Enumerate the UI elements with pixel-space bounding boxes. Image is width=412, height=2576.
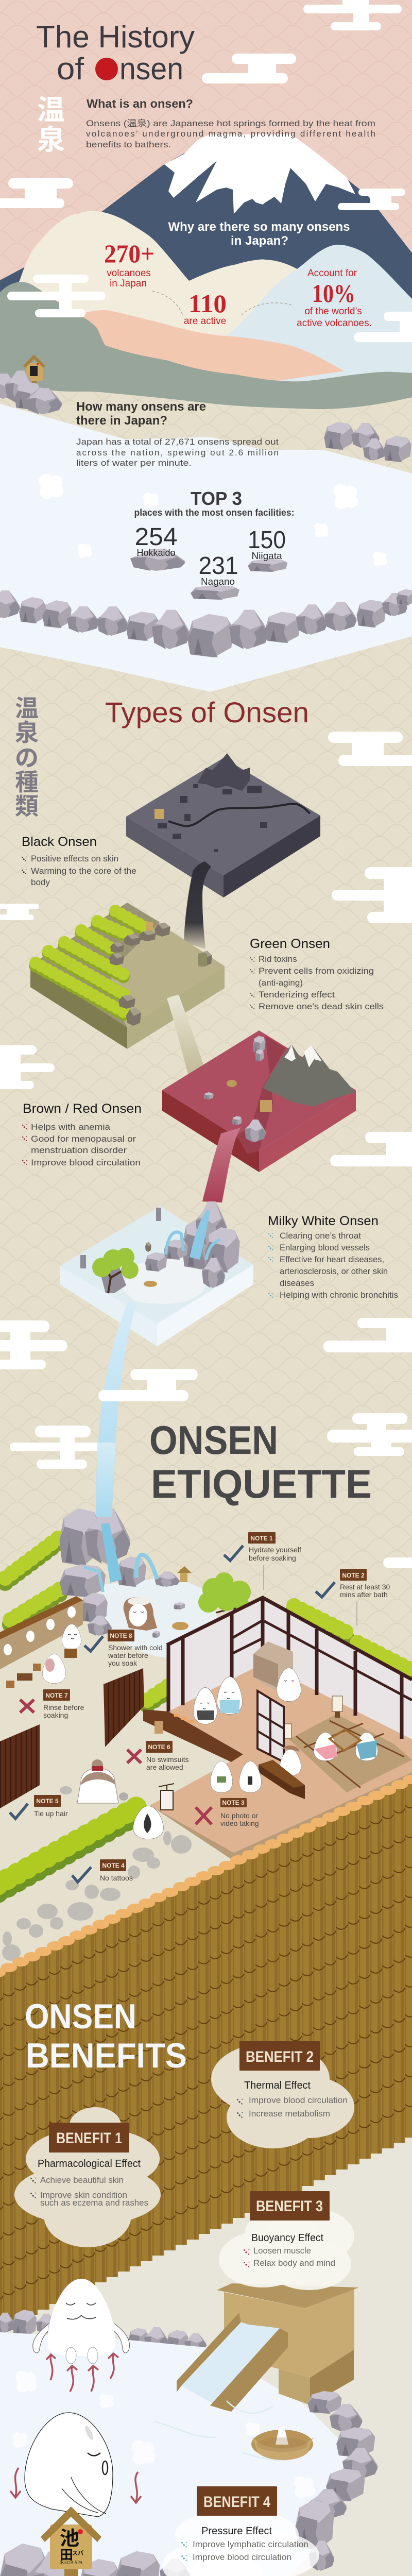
text: milky white onsen: Milky White Onsen	[268, 1214, 379, 1228]
note 8: water before	[108, 1651, 148, 1659]
benefit 1: such as eczema and rashes	[40, 2198, 148, 2208]
text: red onsen: Good for menopausal or	[31, 1134, 136, 1144]
rocks: left cluster	[0, 370, 62, 414]
kanji: types of onsen: 温	[15, 695, 39, 722]
note 3: NOTE 3	[222, 1799, 245, 1806]
benefit 4: Improve blood circulation	[193, 2553, 291, 2562]
etiquette scene ground	[0, 1548, 412, 1976]
note 3: No photo or	[220, 1811, 258, 1820]
top 3: Hokkaido: Hokkaido	[137, 548, 175, 558]
note 8: you soak	[108, 1659, 138, 1667]
stat: 110 active	[184, 289, 227, 327]
text: black onsen: body	[31, 877, 50, 887]
pale blue hill	[226, 245, 412, 381]
how many onsens text: there in Japan?	[76, 414, 167, 428]
text: milky white onsen: Enlarging blood vessels	[280, 1243, 370, 1252]
big sign: 池	[60, 2528, 79, 2550]
stat: 110 active: 110	[188, 289, 227, 318]
steam puffs lower	[12, 2371, 315, 2498]
top 3 heading: TOP 3	[191, 488, 242, 509]
note 1	[224, 1532, 301, 1590]
stepping stones	[2, 1831, 192, 1961]
cloud: top right	[303, 0, 402, 30]
cloud: benefit 3: Loosen muscle	[253, 2246, 311, 2256]
text: milky white onsen: diseases	[280, 1278, 314, 1288]
mountain snow cap	[164, 134, 355, 214]
note 2: Rest at least 30	[340, 1583, 390, 1591]
note 6	[127, 1741, 188, 1771]
text: milky white onsen: arteriosclerosis, or other skin	[280, 1266, 388, 1276]
stat: 10 percent: 10%	[312, 279, 355, 308]
small wooden sign	[23, 354, 45, 397]
right rock chain	[295, 2391, 378, 2571]
waterfall: green	[167, 995, 206, 1083]
hot spring pool	[0, 2332, 368, 2576]
peach hill	[84, 310, 344, 384]
text: green onsen: Prevent cells from oxidizing	[259, 966, 374, 976]
big egg: floating	[25, 2413, 113, 2517]
benefit 4: BENEFIT 4	[203, 2494, 270, 2511]
egg faces	[68, 1634, 294, 1775]
cloud: benefit 3: BENEFIT 3	[256, 2198, 323, 2215]
kanji: types of onsen: 泉	[15, 719, 39, 746]
shoes	[174, 1714, 194, 1723]
note 1: Hydrate yourself	[249, 1546, 301, 1554]
note 8	[84, 1630, 163, 1667]
green hill	[0, 282, 412, 409]
block: black onsen	[126, 753, 320, 897]
cloud: benefit 3	[219, 2191, 354, 2290]
text: black onsen: Warming to the core of the	[31, 866, 136, 876]
cloud: right of mountain	[338, 189, 405, 210]
background: pink pattern	[0, 0, 412, 412]
section text: what is an onsen	[86, 97, 375, 149]
text: red onsen	[22, 1101, 142, 1167]
dashed connector right	[242, 303, 291, 315]
how many onsens text: liters of water per minute.	[76, 458, 192, 468]
kanji: onsen	[37, 95, 65, 156]
cloud: over left hill	[7, 275, 106, 317]
text: green onsen: Rid toxins	[259, 954, 297, 964]
stat: 10 percent: active volcanoes.	[297, 318, 372, 329]
heading: onsen benefits	[25, 1997, 187, 2075]
cloud: upper right	[328, 732, 412, 766]
note 5: NOTE 5	[36, 1798, 59, 1805]
hedges	[5, 1535, 412, 1705]
top 3 heading	[134, 488, 295, 518]
text: black onsen	[22, 835, 136, 887]
note 5	[10, 1795, 68, 1819]
top 3: Niigata	[248, 527, 287, 572]
steam puffs	[39, 474, 387, 566]
text: red onsen: Helps with anemia	[31, 1122, 111, 1132]
text: milky white onsen: Effective for heart diseases,	[280, 1255, 384, 1264]
long hedge	[0, 1759, 412, 1892]
top 3: Niigata: Niigata	[251, 551, 283, 561]
benefit 4: Pressure Effect	[201, 2526, 272, 2537]
note 1: NOTE 1	[250, 1535, 273, 1542]
lower ground	[0, 1958, 412, 2576]
how many onsens text	[76, 400, 279, 468]
top 3: Nagano	[191, 552, 239, 600]
top 3: Hokkaido	[130, 523, 185, 571]
rocks: pool edge	[0, 589, 412, 657]
egg with hair bun	[60, 1759, 128, 1803]
tree	[198, 1572, 251, 1622]
top 3: Niigata: 150	[248, 527, 286, 554]
text: green onsen: Green Onsen	[250, 937, 330, 951]
hot spring water	[0, 404, 412, 692]
cabinet	[253, 1641, 293, 1690]
box and slide	[177, 2283, 359, 2412]
bamboo fence	[0, 1780, 412, 2331]
question: why so many onsens: Why are there so many onsens	[168, 220, 350, 234]
section text: what is an onsen: benefits to bathers.	[86, 140, 171, 149]
how many onsens text: How many onsens are	[76, 400, 206, 414]
kanji: onsen: 泉	[37, 125, 65, 156]
note 7: soaking	[43, 1711, 68, 1719]
eggs: shower and rinse	[6, 1624, 81, 1688]
question: why so many onsens: in Japan?	[231, 234, 288, 248]
block: red onsen	[162, 1030, 356, 1172]
eggs: photo takers	[210, 1761, 262, 1793]
benefit 1: Pharmacological Effect	[38, 2158, 141, 2170]
title: The History	[36, 20, 195, 54]
note 3: video taking	[220, 1819, 259, 1827]
benefit 1: Improve skin condition	[40, 2191, 127, 2200]
kanji: types of onsen: 類	[15, 793, 39, 820]
cloud: left small	[0, 904, 39, 920]
heading: onsen benefits: ONSEN	[25, 1997, 136, 2036]
note 6: NOTE 6	[148, 1743, 170, 1751]
reception desk	[259, 1745, 305, 1799]
benefit 4	[162, 2486, 319, 2576]
big sign: スパ	[72, 2550, 83, 2556]
text: red onsen: Improve blood circulation	[31, 1158, 141, 1167]
how many onsens text: Japan has a total of 27,671 onsens spread out	[76, 437, 279, 447]
eggs: changing room	[193, 1668, 378, 1761]
text: milky white onsen: Helping with chronic bronchitis	[280, 1290, 398, 1300]
text: red onsen: Brown / Red Onsen	[23, 1101, 142, 1116]
rock row behind pool	[0, 2310, 207, 2352]
cloud: left lower	[0, 1045, 55, 1089]
building walls and frame	[167, 1598, 412, 1739]
stat: 270+ volcanoes	[104, 239, 154, 289]
clouds: below milky block	[0, 1318, 412, 1568]
building floor	[143, 1664, 412, 1861]
paper lanterns	[282, 1696, 342, 1738]
rock waterfall and spring pool	[59, 1443, 231, 1658]
lantern	[159, 1784, 174, 1810]
top 3: Nagano: 231	[199, 552, 238, 580]
big egg: relaxing	[33, 2279, 130, 2364]
note 2: mins after bath	[340, 1590, 388, 1599]
cream hill	[0, 211, 309, 371]
note 6: are allowed	[146, 1763, 183, 1771]
note 7: NOTE 7	[45, 1692, 68, 1699]
big sign	[41, 2506, 101, 2576]
text: green onsen	[250, 937, 384, 1011]
bamboo fence tops	[0, 1775, 412, 1977]
note 1: before soaking	[249, 1554, 296, 1562]
note 3	[196, 1798, 259, 1827]
benefit 1: Achieve beautiful skin	[40, 2176, 124, 2185]
stat: 270+ volcanoes: in Japan	[110, 278, 147, 289]
section text: what is an onsen: volcanoes’ underground magma, providing different health	[86, 129, 375, 139]
cloud: benefit 3: Buoyancy Effect	[251, 2232, 323, 2244]
waterfall: black	[184, 861, 211, 949]
stat: 10 percent	[297, 268, 372, 329]
stat: 10 percent: Account for	[307, 268, 357, 279]
text: black onsen: Black Onsen	[22, 835, 97, 849]
cloud: left	[0, 178, 73, 208]
stat: 270+ volcanoes: volcanoes	[107, 268, 151, 279]
background: beige pattern	[0, 376, 412, 1999]
note 2	[316, 1569, 390, 1625]
benefit 2: Improve blood circulation	[249, 2096, 348, 2105]
heading: onsen benefits: BENEFITS	[26, 2036, 187, 2075]
note 6: No swimsuits	[146, 1755, 188, 1764]
cloud: right middle	[332, 867, 412, 923]
stat: 10 percent: of the world’s	[304, 306, 362, 317]
stat: 270+ volcanoes: 270+	[104, 239, 154, 268]
kanji: types of onsen: 種	[15, 769, 39, 795]
wood doors	[0, 1668, 144, 1808]
shower wall	[0, 1596, 83, 1669]
text: black onsen: Positive effects on skin	[31, 854, 118, 863]
benefit 2: BENEFIT 2	[246, 2048, 314, 2065]
note 5: Tie up hair	[34, 1809, 68, 1818]
kanji: types of onsen: の	[15, 744, 39, 771]
text: red onsen: menstruation disorder	[31, 1145, 127, 1155]
question: why so many onsens	[168, 220, 350, 248]
kanji: onsen: 温	[37, 95, 65, 126]
title: nsen	[119, 52, 183, 86]
cloud: lower right hill	[354, 312, 412, 342]
mountain	[0, 134, 412, 371]
dashed connector left	[152, 291, 183, 315]
note 4: No tattoos	[100, 1874, 133, 1882]
wooden tub with sake	[251, 2427, 313, 2460]
big sign: 田	[60, 2547, 73, 2563]
top 3: Nagano: Nagano	[201, 577, 235, 587]
big sign: IKEDA SPA	[59, 2560, 83, 2565]
block: green onsen	[30, 903, 225, 1049]
kanji: types of onsen	[15, 695, 39, 820]
text: green onsen: (anti-aging)	[259, 978, 303, 988]
top 3: Hokkaido: 254	[135, 523, 177, 551]
note 2: NOTE 2	[342, 1572, 365, 1579]
note 4: NOTE 4	[102, 1862, 125, 1869]
section text: what is an onsen: Onsens (温泉) are Japanese hot springs formed by the heat from	[86, 118, 375, 128]
sliding door	[258, 1691, 284, 1762]
cloud: right of red waterfall	[330, 1132, 412, 1166]
cloud: benefit 3: Relax body and mind	[253, 2259, 335, 2268]
steam arrows: lower	[10, 2468, 141, 2503]
note 8: NOTE 8	[110, 1632, 132, 1639]
heading: onsen etiquette: ONSEN	[149, 1417, 278, 1463]
waterfall: red	[202, 1128, 241, 1202]
benefit 1: BENEFIT 1	[56, 2130, 122, 2147]
text: green onsen: Remove one’s dead skin cells	[259, 1002, 384, 1011]
title	[36, 20, 195, 86]
note 7	[20, 1689, 84, 1719]
heading: onsen etiquette: ETIQUETTE	[151, 1461, 372, 1506]
title: of	[57, 52, 84, 86]
note 4	[72, 1859, 133, 1882]
cloud: beside title	[202, 54, 296, 83]
waterfall: milky white	[96, 1301, 136, 1512]
stat: 110 active: are active	[184, 316, 226, 327]
benefit 2: Increase metabolism	[249, 2109, 330, 2119]
note 8: Shower with cold	[108, 1643, 163, 1652]
heading: onsen etiquette	[149, 1417, 372, 1506]
benefit 4: Improve lymphatic circulation	[193, 2540, 308, 2549]
note 7: Rinse before	[43, 1703, 84, 1711]
text: green onsen: Tenderizing effect	[259, 990, 335, 999]
rocks: right cluster	[324, 422, 411, 462]
steam arrows: upper	[46, 2353, 118, 2392]
heading: types of onsen: Types of Onsen	[105, 696, 309, 728]
section text: what is an onsen: What is an onsen?	[87, 97, 193, 110]
top 3 heading: places with the most onsen facilities:	[134, 507, 295, 518]
benefit 2: Thermal Effect	[244, 2080, 311, 2091]
benefit 2	[211, 2041, 354, 2148]
text: milky white onsen	[268, 1214, 398, 1300]
rocks: big sign base	[0, 2544, 190, 2576]
egg with tattoo	[133, 1806, 163, 1839]
water ripple	[154, 2401, 288, 2460]
how many onsens text: across the nation, spewing out 2.6 million	[76, 448, 279, 457]
block: milky white onsen	[60, 1201, 253, 1346]
benefit 1	[14, 2107, 161, 2247]
text: milky white onsen: Clearing one’s throat	[280, 1231, 361, 1241]
